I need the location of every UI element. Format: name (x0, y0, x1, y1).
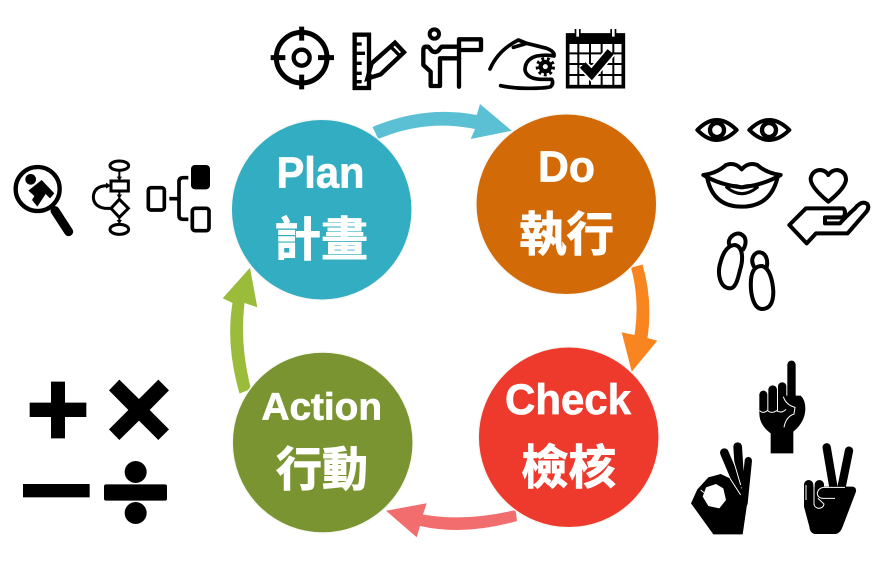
circle: check (478, 347, 659, 528)
label: 檢核: 檢核 (521, 441, 616, 494)
icons: plan top row (271, 27, 625, 89)
icon: flowchart (93, 161, 129, 234)
icon: org tree (148, 165, 210, 231)
icon: ruler and pencil (354, 35, 404, 88)
label: plan: Plan (276, 148, 364, 197)
arrow: action to plan (223, 268, 257, 394)
icon: victory hand (804, 447, 856, 534)
label: action: Action (262, 386, 382, 428)
icon: eye right (749, 120, 789, 140)
icons: plan left row (16, 161, 210, 234)
icon: divide (104, 461, 167, 524)
label: 計畫: 計畫 (274, 213, 368, 266)
icon: hand holding gear (490, 40, 554, 88)
icon: pointing up hand (759, 361, 805, 453)
arrow: check to action (386, 503, 517, 537)
icons: check hands (691, 361, 856, 534)
icon: footprints (719, 234, 773, 309)
icon: minus (23, 484, 90, 497)
icon: plus (30, 382, 86, 438)
arrow: do to check (622, 264, 657, 372)
circle: do (476, 114, 657, 295)
icon: calendar (566, 29, 625, 87)
icon: hand with heart (789, 170, 868, 243)
icon: ok hand (691, 447, 748, 534)
icon: target (271, 27, 334, 89)
arrow: plan to do (372, 104, 512, 139)
icon: eye left (697, 120, 737, 140)
circle: action (232, 352, 413, 533)
label: 執行: 執行 (519, 208, 614, 261)
icons: do senses (697, 120, 868, 309)
icons: action math (23, 380, 169, 524)
icon: lips (703, 164, 781, 207)
icon: magnifier with person (16, 167, 69, 232)
label: check: Check (505, 376, 631, 424)
circle: plan (231, 119, 412, 300)
icon: person with flag (423, 29, 481, 87)
icon: times (109, 380, 169, 440)
label: 行動: 行動 (276, 443, 368, 496)
label: do: Do (538, 143, 595, 192)
